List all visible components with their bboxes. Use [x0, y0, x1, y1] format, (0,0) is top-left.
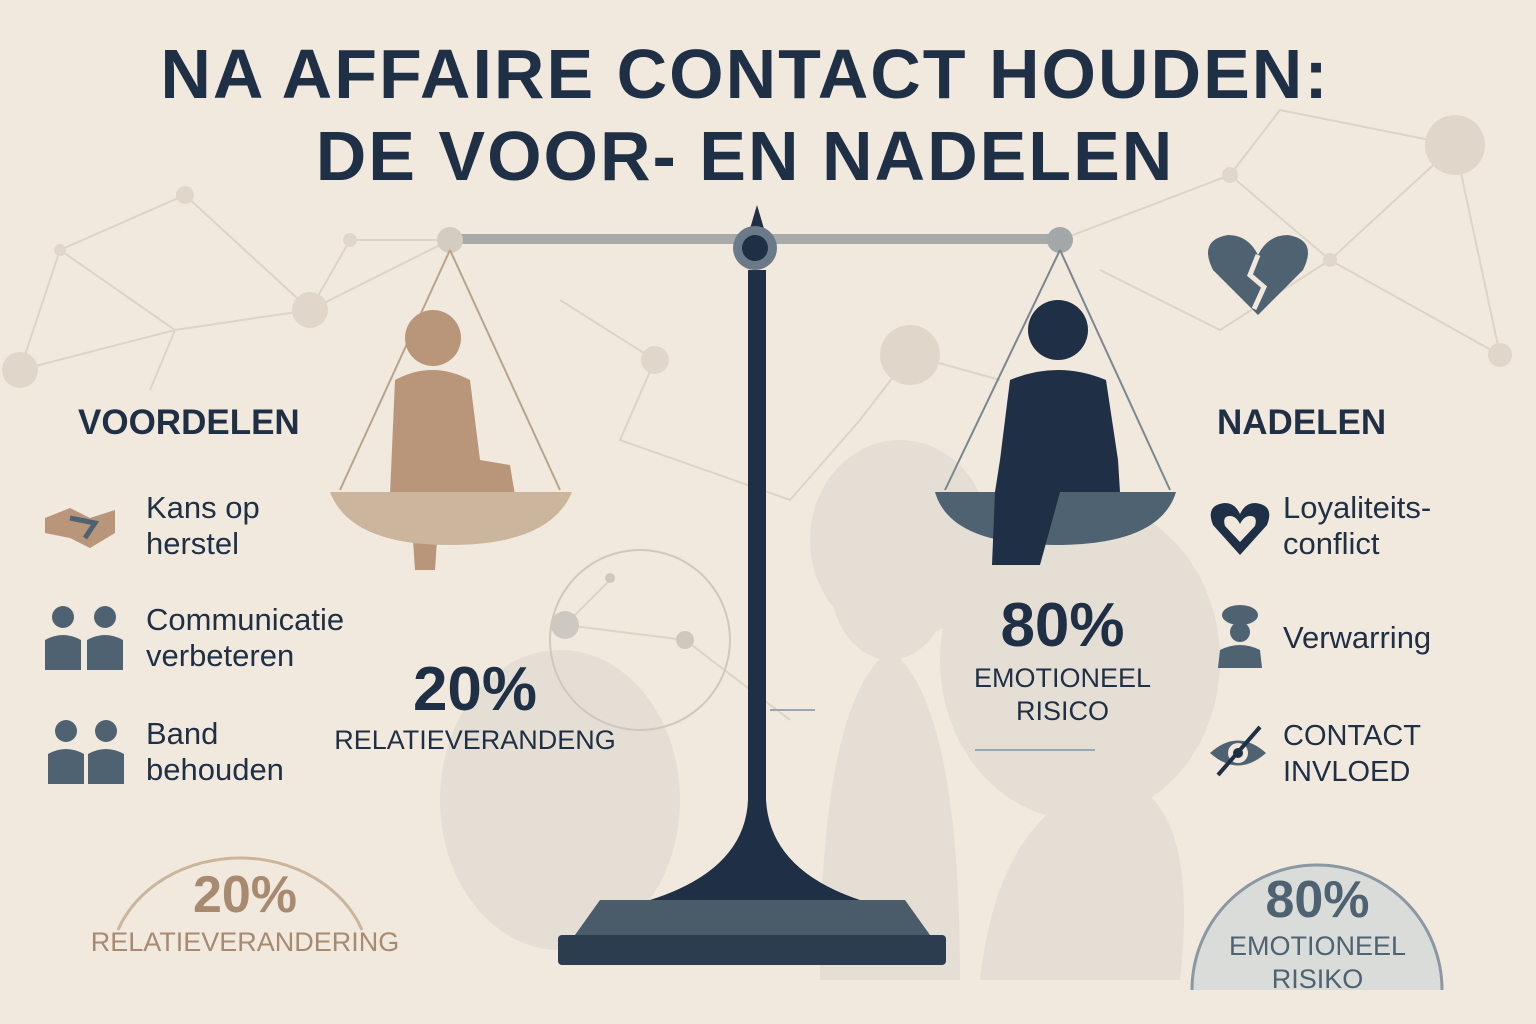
stat: 20% center: RELATIEVERANDENG — [334, 725, 616, 755]
item: kans op herstel — [45, 490, 260, 561]
gauge: 80% — [1229, 871, 1406, 994]
item: band behouden: behouden — [146, 752, 284, 787]
item: communicatie — [45, 602, 344, 673]
icon: broken heart — [1208, 235, 1308, 315]
gauge: 80%: RISIKO — [1272, 964, 1363, 994]
left pan — [330, 250, 572, 570]
gauge: 80%: 80% — [1265, 871, 1370, 929]
base — [575, 900, 930, 935]
item: communicatie: Communicatie — [146, 602, 344, 637]
stat: 80% center: RISICO — [1016, 696, 1109, 726]
gauge: 80%: EMOTIONEEL — [1229, 931, 1406, 961]
gauge: 20%: RELATIEVERANDERING — [91, 927, 399, 957]
item: loyaliteitsconflict: conflict — [1283, 526, 1379, 561]
stat: 80% center: 80% — [1000, 591, 1125, 660]
stat: 20% center: 20% — [413, 655, 537, 724]
item: loyaliteitsconflict: Loyaliteits- — [1283, 490, 1431, 525]
silhouettes — [440, 440, 1220, 980]
right pan — [935, 250, 1176, 565]
item: kans op herstel: Kans op — [146, 490, 260, 525]
title: DE VOOR- EN NADELEN — [316, 117, 1174, 195]
list: nadelen — [1210, 490, 1431, 788]
item: contact invloed: INVLOED — [1283, 756, 1410, 788]
item: kans op herstel: herstel — [146, 526, 239, 561]
title — [160, 35, 1330, 195]
stat: 20% center — [334, 655, 616, 755]
stat: 80% center — [974, 591, 1151, 726]
list: voordelen — [45, 490, 344, 787]
item: band behouden: Band — [146, 716, 218, 751]
title: NA AFFAIRE CONTACT HOUDEN: — [160, 35, 1330, 113]
item: verwarring: Verwarring — [1283, 620, 1431, 655]
item: contact invloed — [1210, 720, 1421, 788]
item: communicatie: verbeteren — [146, 638, 294, 673]
heading: voordelen: VOORDELEN — [78, 403, 300, 442]
stat: 80% center: EMOTIONEEL — [974, 663, 1151, 693]
gauges — [118, 858, 362, 930]
item: loyaliteitsconflict — [1210, 490, 1431, 561]
gauge: 20%: 20% — [193, 866, 297, 924]
item: contact invloed: CONTACT — [1283, 720, 1421, 752]
gauge: 20% — [91, 866, 399, 957]
pole — [650, 270, 860, 900]
heading: nadelen: NADELEN — [1217, 403, 1386, 442]
item: verwarring — [1218, 605, 1431, 668]
item: band behouden — [48, 716, 284, 787]
beam — [437, 205, 1073, 270]
